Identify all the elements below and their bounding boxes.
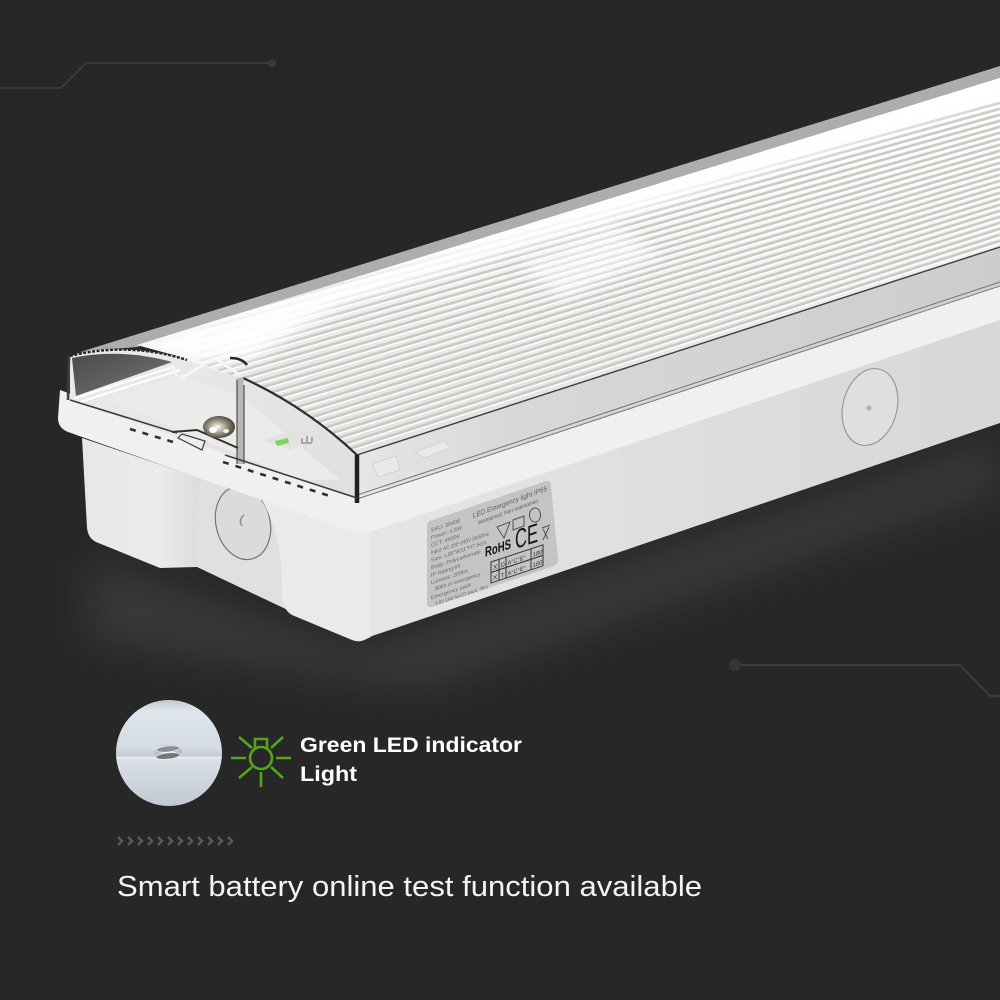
knockout circle right bbox=[834, 363, 906, 451]
body: recess with knockout bbox=[190, 470, 292, 612]
flange bbox=[58, 284, 1000, 533]
heading: green LED indicator: Light bbox=[300, 762, 357, 786]
band arrow mark and box bbox=[372, 441, 449, 477]
label table: X bbox=[493, 563, 498, 572]
label text: specs bbox=[431, 509, 489, 609]
body: long side face bbox=[352, 318, 1000, 640]
body: front block bbox=[262, 500, 370, 641]
thumbnail: LED indicator close-up bbox=[116, 700, 222, 806]
label text: specs: IP Rating:65 bbox=[431, 563, 461, 579]
PCB marks bbox=[302, 436, 312, 443]
green LED bbox=[275, 438, 289, 446]
label table bbox=[491, 545, 543, 583]
label text: specs: Power: 4.5W bbox=[431, 525, 463, 541]
ridge edge bbox=[243, 378, 357, 455]
label table: A°C°E° bbox=[508, 555, 526, 567]
circuit line: right bbox=[729, 659, 1000, 696]
caption: Smart battery online test function available bbox=[117, 871, 702, 903]
floor reflection glow bbox=[90, 440, 1000, 690]
label heading bbox=[473, 484, 547, 528]
label table: T bbox=[500, 572, 504, 580]
gasket dashes bbox=[130, 429, 333, 497]
rating label bbox=[427, 481, 558, 609]
label text: specs: CCT: 4500K bbox=[431, 533, 460, 549]
label table: D bbox=[500, 561, 505, 569]
label text: specs: 3.6V 1Ah Ni-CD pack, 3hrs bbox=[435, 584, 488, 608]
clear end cap bbox=[68, 350, 357, 503]
dark corner post bbox=[355, 455, 359, 503]
lens top highlight bbox=[130, 76, 1000, 362]
heading: green LED indicator bbox=[300, 733, 523, 786]
RoHS and CE marks bbox=[485, 517, 538, 565]
knockout circle left bbox=[208, 481, 278, 565]
label text: specs: 80lm in emergency bbox=[435, 572, 481, 593]
label table: X bbox=[493, 574, 498, 582]
see-through dark window bbox=[72, 354, 172, 396]
RoHS and CE marks: RoHS bbox=[485, 537, 511, 561]
hinge clip bbox=[178, 434, 205, 450]
label table: 180 bbox=[532, 548, 543, 559]
clamp bar bbox=[172, 430, 238, 448]
lens bottom dark edge bbox=[357, 247, 1000, 455]
circuit line: top left bbox=[0, 59, 276, 88]
label heading: LED Emergency light IP65 bbox=[473, 484, 547, 520]
body: left block bbox=[82, 438, 200, 568]
arrow reflection bbox=[172, 358, 240, 380]
icon: green light bulb bbox=[231, 737, 291, 787]
label text: specs: Size: L35"W11"H7.5cm bbox=[431, 540, 487, 564]
label text: specs: Input: AC 200~240V 50/60Hz bbox=[431, 531, 489, 556]
heading: green LED indicator: Green LED indicator bbox=[300, 733, 523, 757]
chrome vertical post bbox=[237, 378, 244, 464]
window light rails bbox=[75, 367, 180, 402]
left glass edge bbox=[68, 356, 69, 400]
lens inner bright tube bbox=[520, 225, 660, 300]
lens ribs bbox=[141, 102, 1000, 450]
grey band under lens bbox=[357, 247, 1000, 500]
label table: A°C°E° bbox=[508, 566, 526, 578]
label text: specs: Emergency pack bbox=[431, 582, 471, 601]
double line on base bbox=[357, 282, 1000, 499]
base line bbox=[70, 400, 357, 498]
emergency light fixture bbox=[58, 66, 1000, 641]
ribbed lens bbox=[77, 78, 1000, 454]
latch screw bbox=[203, 416, 235, 438]
label text: specs: Body: Polycarbonate bbox=[431, 549, 481, 571]
label table: 180 bbox=[532, 559, 543, 569]
rear grey strip bbox=[80, 66, 1000, 352]
certification symbols bbox=[497, 508, 550, 540]
chevron divider bbox=[118, 837, 232, 845]
label heading: Maintained; Non-maintained bbox=[478, 499, 538, 527]
ridge arc edge bbox=[230, 358, 247, 365]
label text: specs: Lumens: 200lm bbox=[431, 568, 468, 586]
end cap arc edge bbox=[70, 350, 187, 360]
inner tray bbox=[108, 376, 340, 480]
label text: specs: SKU: 30408 bbox=[431, 519, 460, 534]
LED board bbox=[262, 428, 320, 450]
RoHS and CE marks: CE bbox=[515, 517, 538, 555]
